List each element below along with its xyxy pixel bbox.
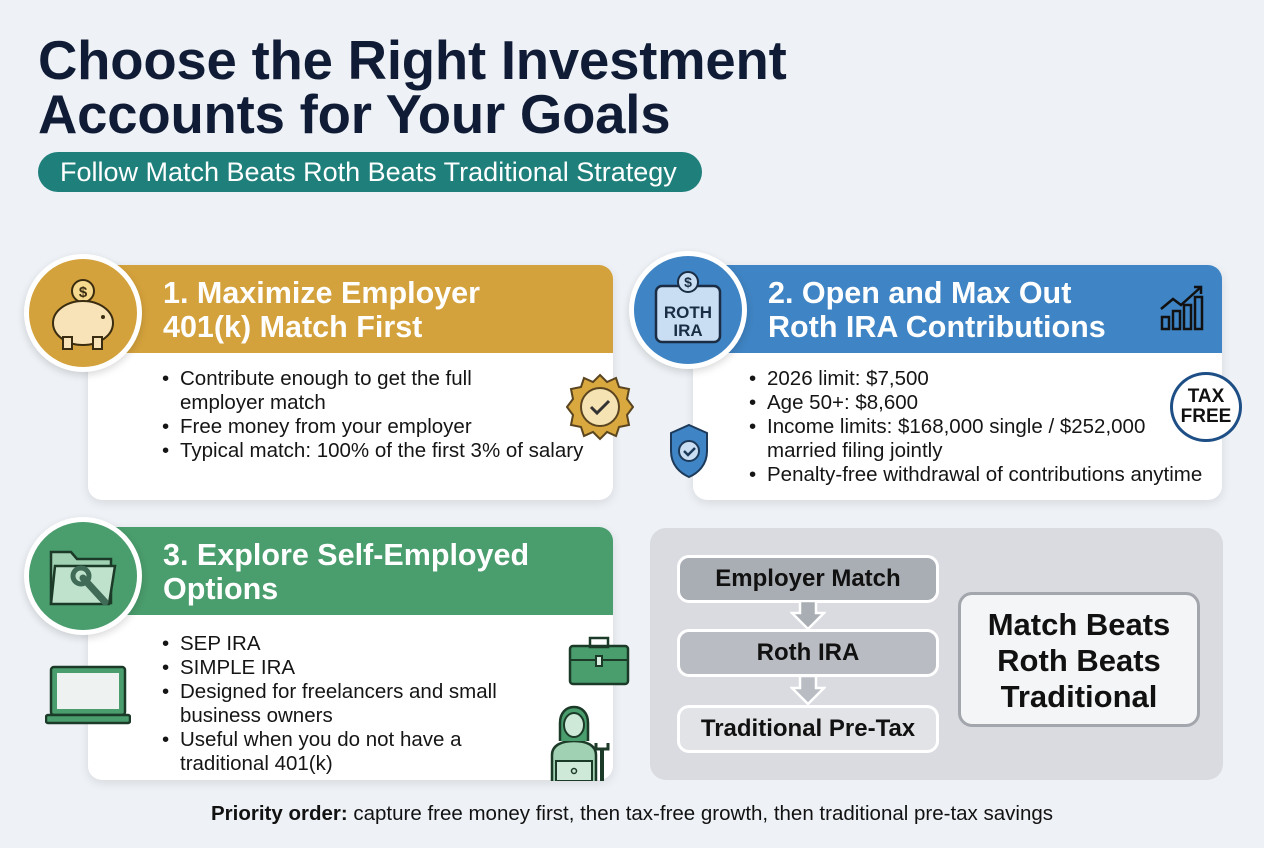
- title: Accounts for Your Goals: [38, 84, 670, 145]
- panel 3 bullets: business owners: [180, 704, 333, 727]
- icon: roth ira circle: $: [684, 274, 692, 290]
- panel 2 bullets: married filing jointly: [767, 439, 942, 462]
- flow: traditional: [677, 705, 939, 753]
- flow: employer match: [677, 555, 939, 603]
- flow: roth ira: [677, 629, 939, 677]
- panel 1 header: 401(k) Match First: [163, 310, 422, 344]
- panel 2 bullets: Income limits: $168,000 single / $252,000: [767, 415, 1145, 438]
- flow: roth ira: Roth IRA: [757, 639, 859, 666]
- subtitle pill: [38, 152, 702, 192]
- icon: badge check: [566, 374, 634, 440]
- panel 3 header: [88, 527, 613, 615]
- title: Choose the Right Investment: [38, 30, 787, 91]
- panel 1 bullets: Typical match: 100% of the first 3% of salary: [180, 439, 583, 462]
- footer note: Priority order: capture free money first, then tax-free growth, then traditional pre-tax savings: [211, 802, 1053, 825]
- panel 3 bullets: Useful when you do not have a: [180, 728, 462, 751]
- icon: shield: [670, 424, 708, 478]
- panel 2 header: Roth IRA Contributions: [768, 310, 1106, 344]
- callout: match beats: [958, 592, 1200, 727]
- panel 3 bullets: traditional 401(k): [180, 752, 333, 775]
- icon: person with laptop: [550, 706, 610, 781]
- panel 3 bullets: SEP IRA: [180, 632, 261, 655]
- icon: roth ira circle: ROTH: [664, 303, 712, 322]
- icon: piggy bank circle: $: [79, 284, 88, 301]
- icon: folder wrench circle: [24, 517, 142, 635]
- panel: roth ira: [693, 265, 1222, 500]
- panel 1 bullets: [162, 367, 584, 462]
- panel: employer match: [88, 265, 613, 500]
- icon: roth ira circle: [629, 251, 747, 369]
- icon: roth ira circle: IRA: [673, 321, 703, 340]
- icon: briefcase: [568, 636, 630, 686]
- panel 3 bullets: [162, 632, 497, 775]
- callout: match beats: Traditional: [1001, 679, 1157, 714]
- panel 2 header: 2. Open and Max Out: [768, 276, 1071, 310]
- panel 3 header: 3. Explore Self-Employed: [163, 538, 529, 572]
- callout: match beats: Roth Beats: [997, 643, 1161, 678]
- icon: tax free: FREE: [1181, 406, 1231, 427]
- callout: match beats: Match Beats: [988, 607, 1170, 642]
- panel 2 header: [693, 265, 1222, 353]
- subtitle pill: Follow Match Beats Roth Beats Traditional Strategy: [60, 157, 677, 187]
- panel 1 header: 1. Maximize Employer: [163, 276, 480, 310]
- icon: tax free: TAX: [1188, 386, 1224, 407]
- panel 2 bullets: [750, 367, 1202, 486]
- panel 1 bullets: Free money from your employer: [180, 415, 472, 438]
- title: [38, 30, 787, 145]
- panel 2 bullets: 2026 limit: $7,500: [767, 367, 929, 390]
- panel 3 header: Options: [163, 572, 278, 606]
- arrow: down 2: [790, 677, 826, 705]
- panel 1 bullets: Contribute enough to get the full: [180, 367, 472, 390]
- panel: priority flow: [650, 528, 1223, 780]
- arrow: down 1: [790, 602, 826, 629]
- panel 2 bullets: Age 50+: $8,600: [767, 391, 918, 414]
- panel 1 header: [88, 265, 613, 353]
- panel 3 bullets: Designed for freelancers and small: [180, 680, 497, 703]
- flow: traditional: Traditional Pre-Tax: [701, 715, 915, 742]
- flow: employer match: Employer Match: [715, 565, 901, 592]
- icon: growth chart: [1160, 286, 1204, 330]
- panel 3 bullets: SIMPLE IRA: [180, 656, 295, 679]
- icon: piggy bank circle: [24, 254, 142, 372]
- icon: tax free: [1170, 372, 1242, 442]
- icon: laptop: [45, 666, 131, 724]
- panel 2 bullets: Penalty-free withdrawal of contributions anytime: [767, 463, 1202, 486]
- panel: self-employed: [88, 527, 613, 780]
- panel 1 bullets: employer match: [180, 391, 326, 414]
